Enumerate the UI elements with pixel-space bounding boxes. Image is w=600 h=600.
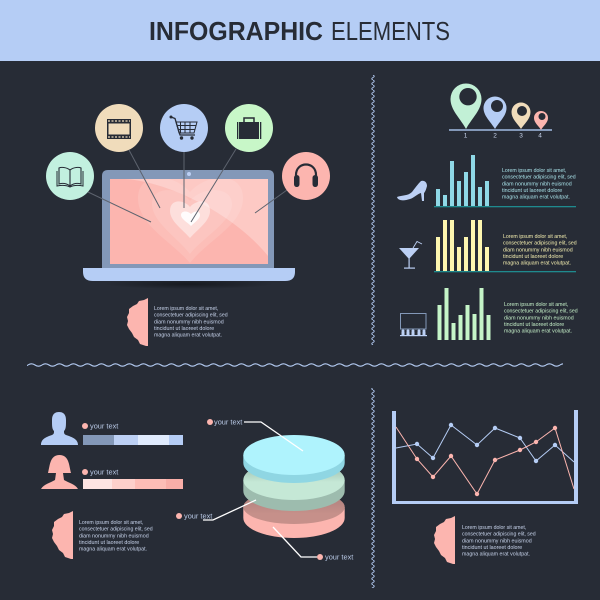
text block: magna aliquam erat volutpat. (504, 329, 572, 335)
icon: male user (41, 412, 78, 445)
title: INFOGRAPHIC (149, 16, 323, 46)
label: top disc: your text (214, 418, 242, 426)
icon: headphones (282, 152, 330, 200)
text block: magna aliquam erat volutpat. (462, 552, 530, 558)
text block: Lorem ipsum dolor sit amet, (502, 168, 567, 174)
icon: film strip (95, 104, 143, 152)
text block (503, 234, 577, 267)
text block: magna aliquam erat volutpat. (503, 261, 571, 267)
text block: laptop caption: tincidunt ut laoreet dolore (154, 326, 214, 332)
text block: diam nonummy nibh euismod (502, 181, 572, 187)
label: middle disc: your text (184, 512, 212, 520)
label: bottom disc: your text (325, 552, 353, 562)
label: male: your text (90, 422, 118, 430)
text block: consectetuer adipiscing elit, sed (502, 175, 576, 181)
text block: tincidunt ut laoreet dolore (462, 545, 522, 551)
panel: map pins (449, 83, 552, 140)
pin numbers: 3 (519, 132, 523, 140)
text block: Lorem ipsum dolor sit amet, (504, 302, 569, 308)
chart frame (392, 410, 578, 504)
text block (52, 511, 153, 559)
stacked bar: male (83, 435, 183, 445)
pin 1 (450, 83, 482, 129)
text block: laptop caption: Lorem ipsum dolor sit amet, (154, 306, 219, 312)
text block: tincidunt ut laoreet dolore (503, 254, 563, 260)
title (149, 16, 450, 46)
pin numbers: 4 (538, 132, 542, 140)
panel: people statistics (41, 412, 183, 559)
disc: bottom pink (243, 490, 345, 538)
label: female: your text (90, 468, 118, 476)
text block: Lorem ipsum dolor sit amet, (503, 234, 568, 240)
series: blue (396, 423, 574, 463)
series: pink (396, 426, 574, 496)
laptop (83, 170, 295, 289)
text block: diam nonummy nibh euismod (462, 538, 532, 544)
text block (502, 168, 576, 201)
text block: magna aliquam erat volutpat. (79, 547, 147, 553)
text block: laptop caption: magna aliquam erat volutpat. (154, 333, 222, 339)
icon: female user (41, 455, 78, 489)
text block: Lorem ipsum dolor sit amet, (462, 525, 527, 531)
pin numbers: 2 (493, 132, 497, 140)
text block: magna aliquam erat volutpat. (502, 195, 570, 201)
panel: shoe bar chart (397, 155, 576, 207)
disc: middle green (243, 460, 345, 511)
text block: Lorem ipsum dolor sit amet, (79, 520, 144, 526)
panel: line chart (392, 410, 578, 564)
connector lines (88, 149, 287, 222)
text block: diam nonummy nibh euismod (79, 533, 149, 539)
pin 4 (534, 111, 548, 130)
text block: diam nonummy nibh euismod (503, 247, 573, 253)
text block: tincidunt ut laoreet dolore (502, 188, 562, 194)
bar chart (438, 288, 490, 340)
text block: tincidunt ut laoreet dolore (504, 322, 564, 328)
text block: tincidunt ut laoreet dolore (79, 540, 139, 546)
bar chart (434, 220, 576, 272)
panel: theater bar chart (400, 288, 578, 340)
panel: cocktail bar chart (399, 220, 577, 272)
text block: laptop caption (127, 298, 228, 346)
text block: diam nonummy nibh euismod (504, 315, 574, 321)
pin 3 (512, 102, 530, 129)
header band (0, 0, 600, 61)
text block: laptop caption: diam nonummy nibh euismod (154, 319, 224, 325)
leader lines (203, 422, 317, 557)
disc: top cyan (243, 435, 345, 483)
icon: suitcase (225, 104, 273, 152)
icon: high heel shoe (397, 181, 427, 201)
icon: shopping cart (160, 104, 208, 152)
panel: laptop with icons (46, 104, 330, 346)
pin numbers: 1 (464, 132, 468, 140)
text block: laptop caption: consectetuer adipiscing elit, sed (154, 313, 228, 319)
text block: consectetuer adipiscing elit, sed (504, 309, 578, 315)
pin 2 (484, 97, 506, 129)
icon: martini glass (399, 242, 422, 269)
stacked bar: female (83, 479, 183, 489)
text block (504, 302, 578, 335)
panel: stacked disc chart (176, 418, 353, 562)
icon: book (46, 152, 94, 200)
text block: consectetuer adipiscing elit, sed (79, 527, 153, 533)
icon: cinema screen with audience (400, 314, 427, 336)
text block: consectetuer adipiscing elit, sed (462, 532, 536, 538)
pin numbers (464, 132, 542, 140)
text block: consectetuer adipiscing elit, sed (503, 241, 577, 247)
bar chart (434, 155, 576, 207)
text block (434, 516, 536, 564)
title: ELEMENTS (331, 16, 450, 46)
